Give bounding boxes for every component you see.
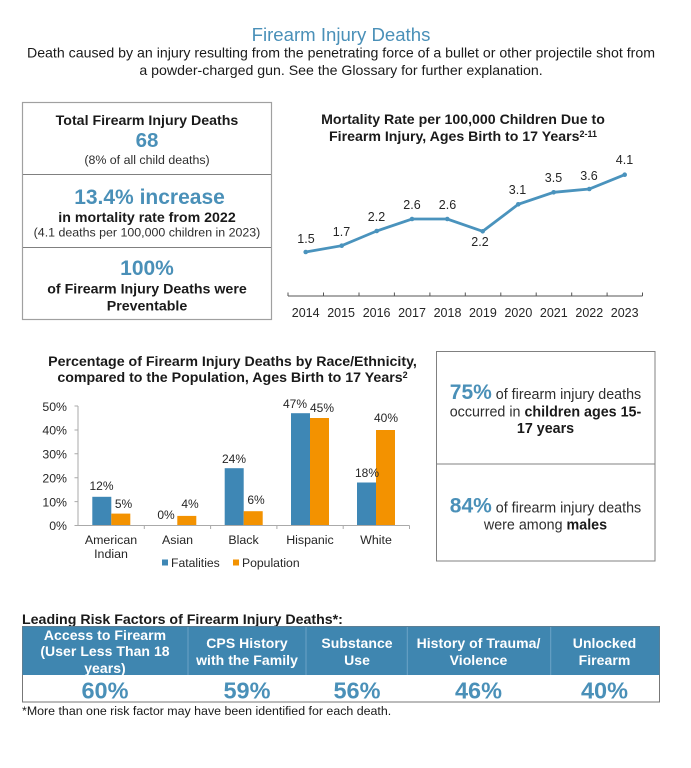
category labels <box>85 533 392 561</box>
stat: total deaths <box>56 113 238 167</box>
bar value labels: 0% <box>157 508 175 522</box>
callout: males: were among males <box>483 518 607 534</box>
stat: mortality increase <box>34 186 260 240</box>
stat: mortality increase: (4.1 deaths per 100,000 children in 2023) <box>34 226 260 240</box>
stat: preventable: Preventable <box>107 298 187 314</box>
fatalities bars <box>92 413 376 526</box>
axis: 2016 <box>363 306 391 320</box>
risk: trauma: 46% <box>455 678 502 704</box>
category labels: Hispanic <box>286 533 334 547</box>
stat: total deaths: 68 <box>136 129 158 152</box>
bar value labels: 12% <box>89 479 114 493</box>
callout: ages: occurred in children ages 15- <box>450 405 641 421</box>
stat: preventable: of Firearm Injury Deaths were <box>47 282 247 298</box>
bar value labels: 6% <box>247 493 265 507</box>
line chart: mortality rate: 2-11 <box>579 129 597 139</box>
risk: access to firearm: years) <box>84 660 126 676</box>
bar chart: race and ethnicity: compared to the Population, Ages Birth to 17 Years <box>57 370 403 386</box>
bar value labels: 47% <box>283 397 307 411</box>
risk: trauma: History of Trauma/ <box>417 635 540 651</box>
legend: Fatalities <box>171 556 220 570</box>
risk: unlocked firearm: 40% <box>581 678 628 704</box>
y axis: 0% <box>49 519 67 533</box>
bar chart: race and ethnicity: 2 <box>403 370 408 380</box>
data labels: 2.6 <box>439 198 456 212</box>
axis: 2021 <box>540 306 568 320</box>
bar value labels: 40% <box>374 411 398 425</box>
risk: unlocked firearm <box>573 635 636 704</box>
y axis: 20% <box>42 472 67 486</box>
data labels <box>297 153 633 249</box>
risk: substance use <box>321 635 393 704</box>
section heading: Leading Risk Factors of Firearm Injury Deaths*: <box>22 612 343 628</box>
category labels: Black <box>228 533 259 547</box>
risk: trauma <box>417 635 540 704</box>
callout: ages: 75% of firearm injury deaths <box>450 381 641 404</box>
axis: 2023 <box>611 306 639 320</box>
data labels: 1.7 <box>333 225 350 239</box>
chart title: Percentage of Firearm Injury Deaths by Race/Ethnicity, <box>48 354 417 370</box>
axis <box>288 292 642 320</box>
stat: mortality increase: in mortality rate from 2022 <box>58 210 236 226</box>
risk: cps history: 59% <box>223 678 271 704</box>
panel: age and sex callouts <box>436 352 655 561</box>
y axis <box>42 400 78 533</box>
data labels: 2.6 <box>403 198 421 212</box>
data labels: 3.6 <box>580 169 598 183</box>
data labels: 1.5 <box>297 232 315 246</box>
bar value labels: 18% <box>355 466 379 480</box>
stat: mortality increase: 13.4% increase <box>74 186 225 209</box>
data labels: 2.2 <box>368 210 385 224</box>
stat: preventable <box>47 257 247 314</box>
category labels: American <box>85 533 137 547</box>
axis: 2022 <box>575 306 603 320</box>
axis: 2017 <box>398 306 426 320</box>
data labels: 4.1 <box>616 153 633 167</box>
risk: cps history <box>195 635 298 704</box>
bar value labels <box>89 397 398 522</box>
definition text <box>27 44 655 78</box>
axis: 2015 <box>327 306 355 320</box>
category labels: White <box>360 533 392 547</box>
title: Firearm Injury Deaths <box>252 24 430 45</box>
bar value labels: 45% <box>310 401 334 415</box>
risk: trauma: Violence <box>450 652 508 668</box>
risk: substance use: Use <box>344 652 370 668</box>
stat: total deaths: (8% of all child deaths) <box>84 153 210 167</box>
risk: access to firearm: 60% <box>81 678 129 704</box>
legend: Population <box>242 556 300 570</box>
bar value labels: 5% <box>115 497 133 511</box>
chart title: Mortality Rate per 100,000 Children Due to <box>321 111 605 127</box>
y axis: 30% <box>42 448 67 462</box>
panel: leading risk factors <box>22 612 660 718</box>
bar value labels: 24% <box>222 452 246 466</box>
callout: ages: 17 years <box>517 421 574 437</box>
risk: cps history: with the Family <box>195 652 298 668</box>
definition text: Death caused by an injury resulting from the penetrating force of a bullet or other projectile shot from <box>27 44 655 60</box>
footnote: *More than one risk factor may have been identified for each death. <box>22 704 391 718</box>
axis: 2018 <box>434 306 461 320</box>
risk: access to firearm: (User Less Than 18 <box>40 643 170 659</box>
data line <box>303 172 627 254</box>
y axis: 10% <box>42 496 67 510</box>
line chart: mortality rate: Firearm Injury, Ages Birth to 17 Years <box>329 128 579 144</box>
bar value labels: 4% <box>181 497 199 511</box>
risk: unlocked firearm: Firearm <box>579 652 630 668</box>
y axis: 50% <box>42 400 67 414</box>
axis: 2014 <box>292 306 320 320</box>
callout: males <box>450 494 641 534</box>
category labels: Asian <box>162 533 193 547</box>
stat: total deaths: Total Firearm Injury Deaths <box>56 113 238 129</box>
risk: access to firearm: Access to Firearm <box>44 627 166 643</box>
data labels: 3.1 <box>509 183 526 197</box>
risk: access to firearm <box>40 627 170 704</box>
axis: 2019 <box>469 306 497 320</box>
panel: key statistics <box>22 102 272 320</box>
stat: preventable: 100% <box>120 257 174 280</box>
data labels: 2.2 <box>471 235 489 249</box>
legend <box>162 556 300 570</box>
population bars <box>111 418 395 526</box>
axis: 2020 <box>504 306 532 320</box>
bar chart: race and ethnicity <box>42 354 417 570</box>
callout: ages <box>450 381 641 437</box>
line chart: mortality rate <box>288 111 642 320</box>
risk: unlocked firearm: Unlocked <box>573 635 636 651</box>
risk: substance use: 56% <box>333 678 381 704</box>
callout: males: 84% of firearm injury deaths <box>450 494 641 517</box>
category labels: Indian <box>94 547 128 561</box>
risk: cps history: CPS History <box>206 635 288 651</box>
x axis <box>78 526 410 529</box>
data labels: 3.5 <box>545 171 562 185</box>
y axis: 40% <box>42 424 67 438</box>
risk: substance use: Substance <box>321 635 393 651</box>
page heading <box>27 24 655 78</box>
table <box>22 626 660 704</box>
definition text: a powder-charged gun. See the Glossary for further explanation. <box>139 62 543 78</box>
